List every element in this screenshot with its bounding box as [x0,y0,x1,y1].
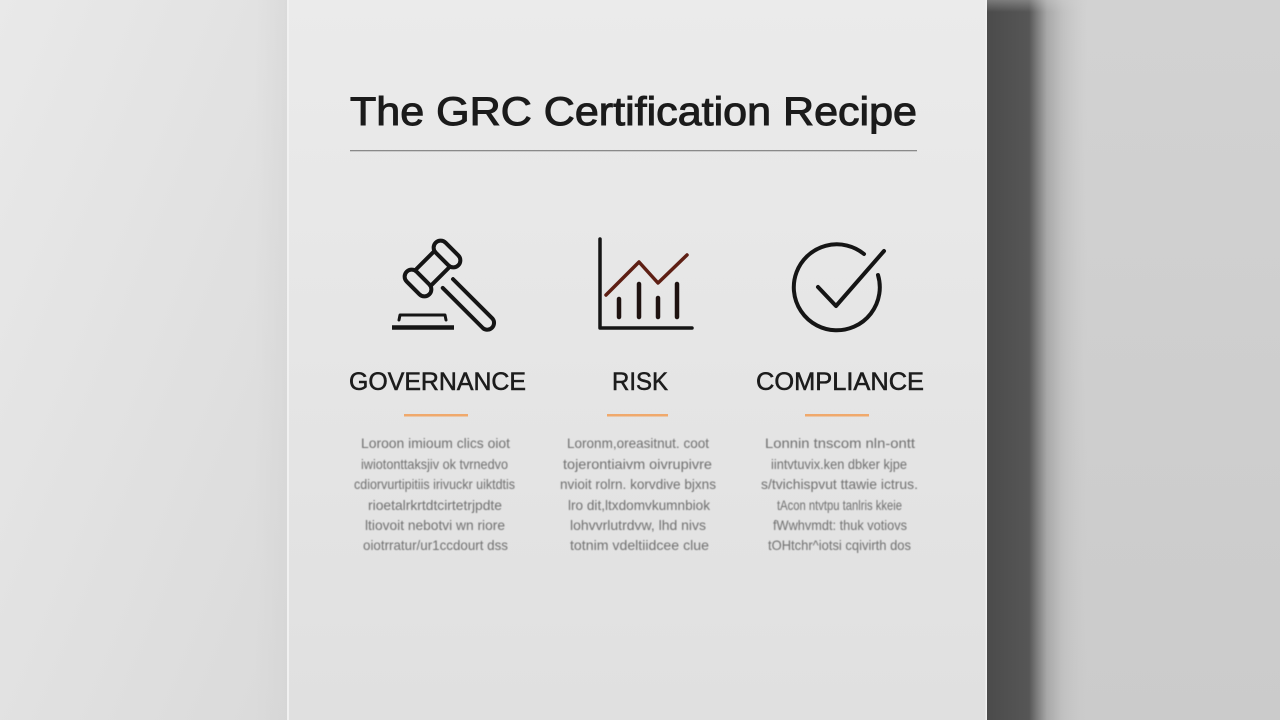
column: governance [349,238,526,553]
column: risk [560,239,716,553]
text: governance body: iwiotonttaksjiv ok tvrnedvo [361,456,508,472]
icon: chart [600,239,692,328]
text: risk body: nvioit rolrn. korvdive bjxns [560,476,716,492]
text: governance body: cdiorvurtipitiis irivuckr uiktdtis [354,476,515,492]
title: The GRC Certification Recipe [350,90,917,134]
text: compliance body [761,435,918,553]
text: compliance body: s/tvichispvut ttawie ictrus. [761,476,918,492]
heading: governance: GOVERNANCE [349,368,526,396]
icon: check circle [794,244,884,330]
text: compliance body: iintvtuvix.ken dbker kjpe [771,456,907,472]
heading: compliance: COMPLIANCE [756,368,924,396]
text: risk body: lro dit,ltxdomvkumnbiok [568,497,711,513]
text: compliance body: tAcon ntvtpu tanlris kkeie [777,497,902,513]
text: governance body: oiotrratur/ur1ccdourt dss [363,537,508,553]
text: risk body: Loronm,oreasitnut. coot [567,435,709,451]
text: risk body [560,435,716,553]
text: risk body: lohvvrlutrdvw, lhd nivs [570,517,706,533]
text: risk body: totnim vdeltiidcee clue [570,537,709,553]
text: compliance body: fWwhvmdt: thuk votiovs [773,517,907,533]
text: governance body: Loroon imioum clics oiot [361,435,510,451]
column: compliance [756,244,924,553]
text: compliance body: tOHtchr^iotsi cqivirth dos [768,537,911,553]
page shadow [987,0,1087,720]
text: compliance body: Lonnin tnscom nln-ontt [765,435,915,451]
text: risk body: tojerontiaivm oivrupivre [563,456,712,472]
panel: paper sheet [287,0,987,720]
text: governance body [354,435,515,553]
text: governance body: ltiovoit nebotvi wn riore [365,517,505,533]
text: governance body: rioetalrkrtdtcirtetrjpdte [368,497,502,513]
heading: risk: RISK [612,368,668,396]
icon: gavel [392,238,511,347]
